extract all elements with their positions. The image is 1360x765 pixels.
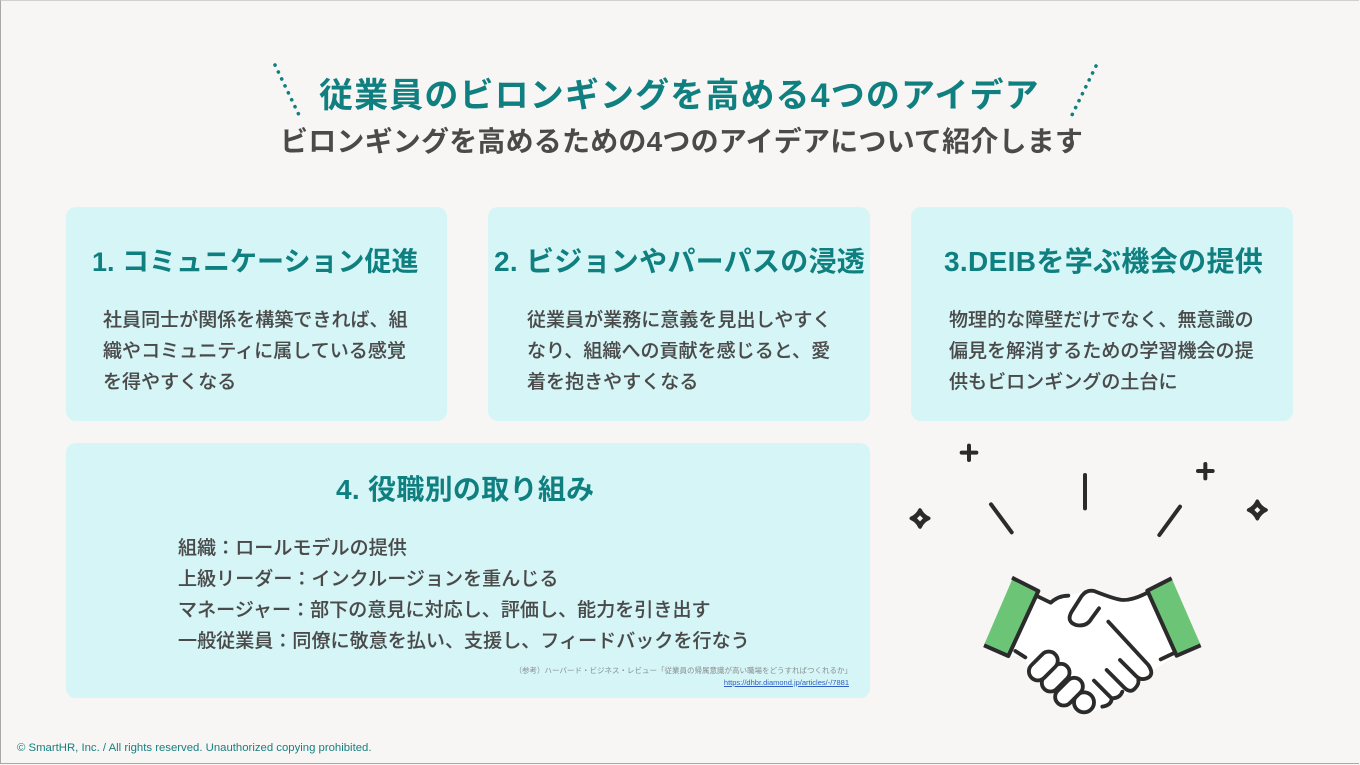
cuff: right	[1147, 578, 1201, 656]
text block: 3: 偏見を解消するための学習機会の提	[949, 341, 1254, 362]
panel: 4 by role	[66, 443, 870, 698]
cuff: left	[984, 578, 1038, 656]
text block: 4: 一般従業員：同僚に敬意を払い、支援し、フィードバックを行なう	[178, 631, 750, 652]
reference note: （参考）ハーバード・ビジネス・レビュー「従業員の帰属意識が高い職場をどうすればつくれるか」	[515, 666, 852, 675]
text block: 3	[949, 310, 1254, 393]
hands fill	[1008, 591, 1177, 713]
text block: 2: なり、組織への貢献を感じると、愛	[527, 341, 830, 362]
text block: 3: 物理的な障壁だけでなく、無意識の	[949, 310, 1254, 331]
text block: 2: 従業員が業務に意義を見出しやすく	[527, 310, 831, 331]
panel: 3 DEIB	[911, 207, 1293, 421]
heading: 2: 2. ビジョンやパーパスの浸透	[494, 246, 865, 277]
text block: 1: 織やコミュニティに属している感覚	[103, 341, 406, 362]
panel: 1 communication	[66, 207, 447, 421]
heading: 3: 3.DEIBを学ぶ機会の提供	[944, 246, 1263, 277]
title accent: left dots	[273, 63, 300, 116]
text block: 1: 社員同士が関係を構築できれば、組	[103, 310, 408, 331]
text block: 4	[178, 538, 750, 652]
copyright: © SmartHR, Inc. / All rights reserved. Unauthorized copying prohibited.	[17, 742, 372, 754]
sparkle plus marks	[962, 446, 1213, 478]
sparkle star: left	[911, 510, 929, 527]
text block: 1: を得やすくなる	[103, 372, 236, 393]
panel: 2 vision	[488, 207, 870, 421]
text block: 3: 供もビロンギングの土台に	[949, 372, 1177, 393]
burst lines	[991, 475, 1180, 535]
text block: 4: マネージャー：部下の意見に対応し、評価し、能力を引き出す	[178, 600, 711, 621]
title accent: right dots	[1070, 64, 1098, 116]
icon: handshake with sparkles	[909, 444, 1268, 714]
subtitle: ビロンギングを高めるための4つのアイデアについて紹介します	[280, 126, 1083, 157]
text block: 1	[103, 310, 408, 393]
title: 従業員のビロンギングを高める4つのアイデア	[319, 77, 1040, 115]
hand outlines	[1015, 591, 1173, 712]
reference link: https://dhbr.diamond.jp/articles/-/7881	[724, 678, 849, 687]
heading: 4: 4. 役職別の取り組み	[336, 474, 594, 505]
text block: 4: 組織：ロールモデルの提供	[178, 538, 407, 559]
text block: 4: 上級リーダー：インクルージョンを重んじる	[178, 569, 558, 590]
heading: 1: 1. コミュニケーション促進	[92, 247, 418, 277]
text block: 2: 着を抱きやすくなる	[527, 372, 698, 393]
sparkle star: right	[1249, 501, 1266, 519]
text block: 2	[527, 310, 831, 393]
